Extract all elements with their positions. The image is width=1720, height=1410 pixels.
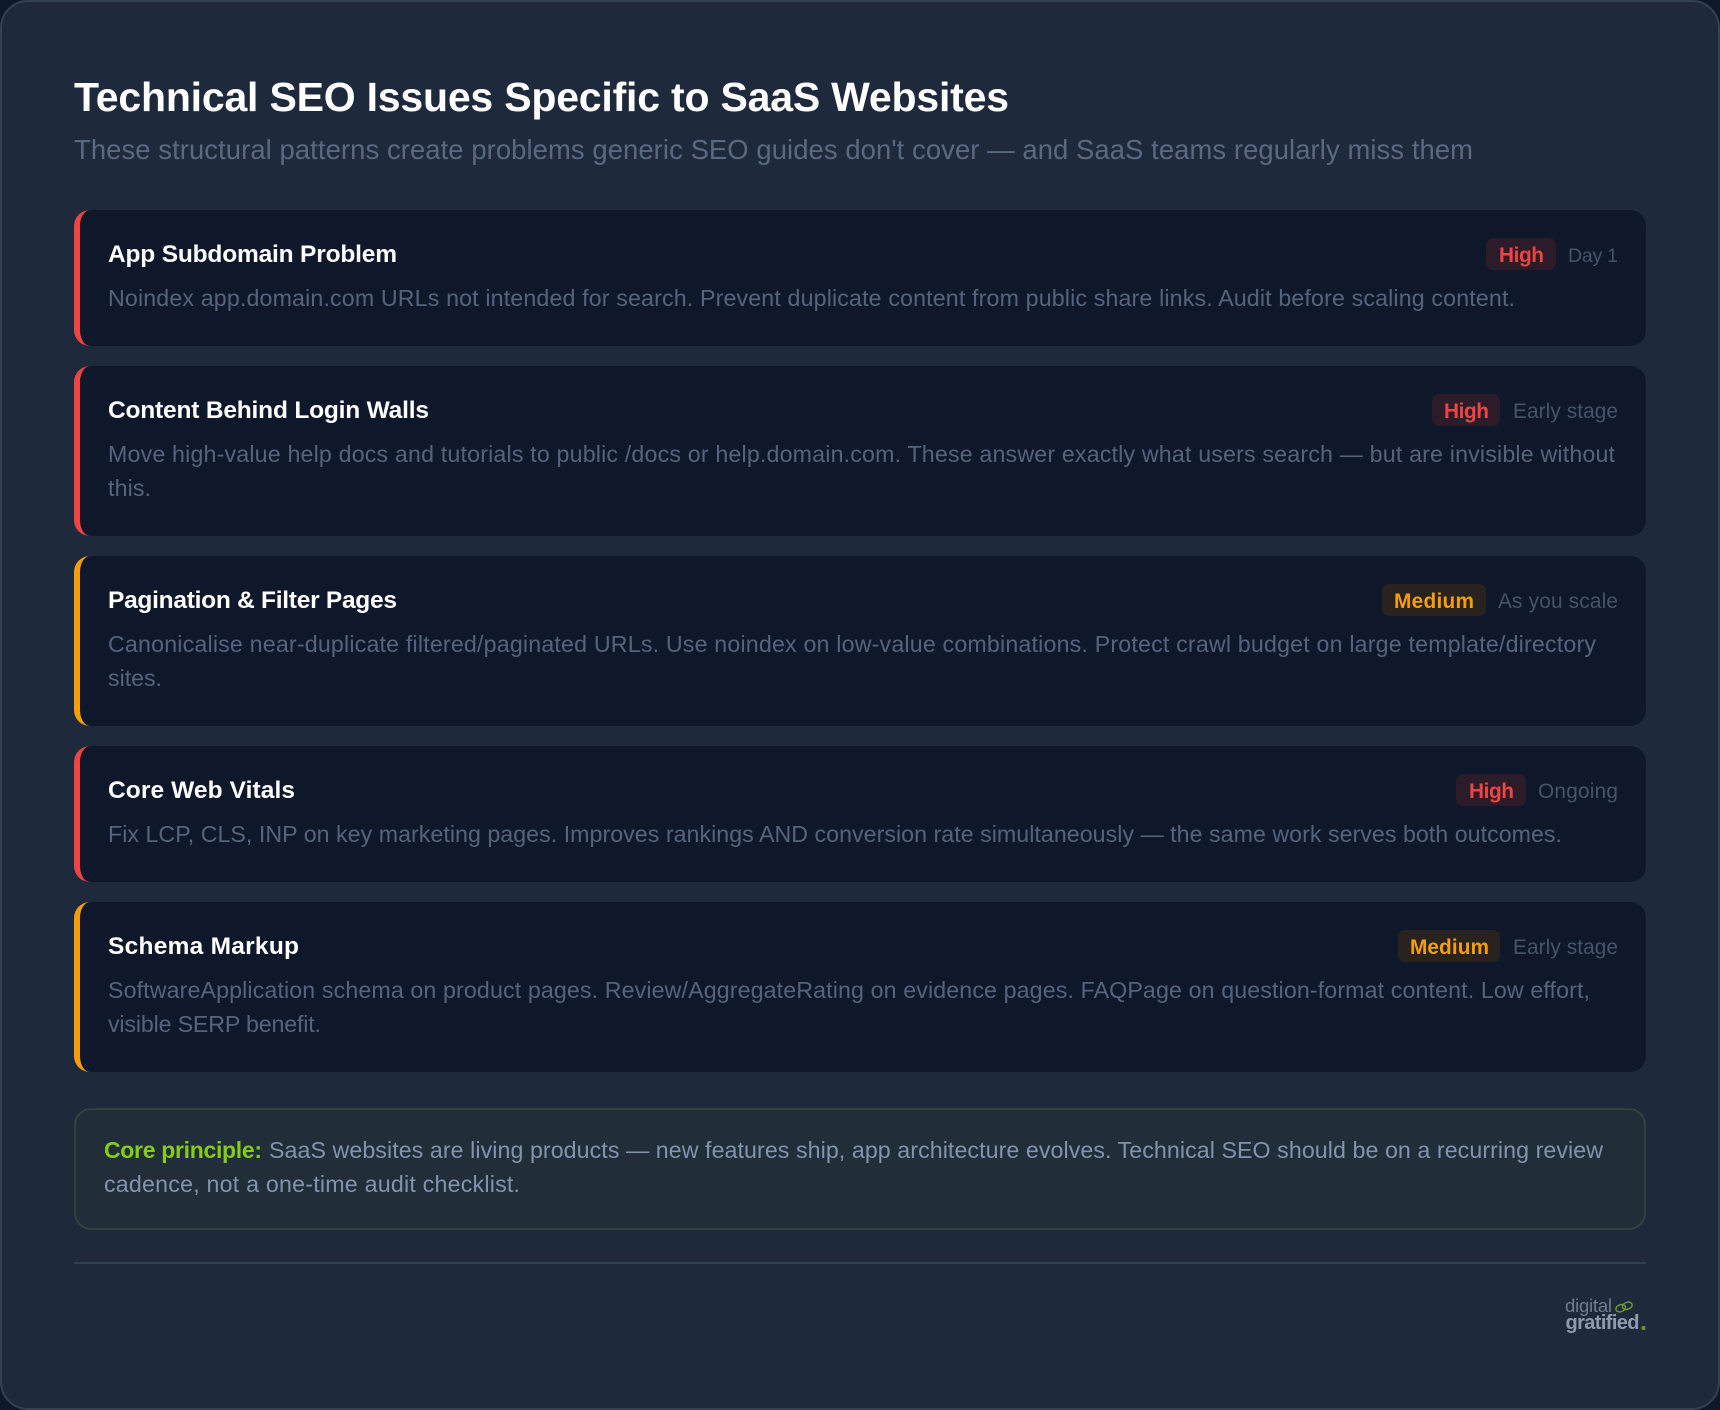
panel: Pagination & Filter Pages [74,556,1646,726]
description: sites. [108,665,162,691]
severity accent bar [74,746,114,882]
card background [80,556,1646,726]
subtitle: These structural patterns create problems generic SEO guides don't cover — and SaaS teams regularly miss them [74,134,1473,165]
description: Fix LCP, CLS, INP on key marketing pages. Improves rankings AND conversion rate simultaneously — the same work serves both outcomes. [108,821,1562,847]
severity badge: High [1499,244,1544,267]
severity badge [1486,238,1556,270]
card heading: Pagination & Filter Pages [108,587,397,614]
timing label: As you scale [1498,590,1618,613]
severity accent bar [74,556,114,726]
card heading: Schema Markup [108,933,299,960]
description [108,441,1616,501]
severity accent bar [74,366,114,536]
callout: core principle: cadence, not a one-time audit checklist. [104,1171,520,1197]
callout: core principle: SaaS websites are living products — new features ship, app architecture evolves. Technical SEO should be on a recurring review [269,1137,1603,1163]
panel: Content Behind Login Walls [74,366,1646,536]
description: Canonicalise near-duplicate filtered/paginated URLs. Use noindex on low-value combinations. Protect crawl budget on large template/directory [108,631,1596,657]
panel: App Subdomain Problem [74,210,1646,346]
description: this. [108,475,151,501]
card background [80,902,1646,1072]
severity badge [1398,930,1500,962]
card heading: App Subdomain Problem [108,241,397,268]
panel: Core Web Vitals [74,746,1646,882]
card background [80,366,1646,536]
severity badge: High [1469,780,1514,803]
panel: Schema Markup [74,902,1646,1072]
logo: digital gratified: digital [1565,1295,1612,1316]
description [108,977,1590,1037]
timing label: Early stage [1513,400,1618,423]
severity badge: High [1444,400,1489,423]
callout: core principle: Core principle: [104,1137,262,1163]
timing label: Early stage [1513,936,1618,959]
description: SoftwareApplication schema on product pages. Review/AggregateRating on evidence pages. FAQPage on question-format content. Low effort, [108,977,1590,1003]
card heading: Content Behind Login Walls [108,397,429,424]
card background [80,746,1646,882]
severity badge: Medium [1410,936,1489,959]
title: Technical SEO Issues Specific to SaaS Websites [74,74,1009,120]
description [108,631,1596,691]
logo: digital gratified: gratified [1566,1312,1640,1334]
icon: chain link [1615,1301,1633,1313]
severity badge [1432,394,1500,426]
callout: core principle [75,1109,1645,1229]
timing label: Day 1 [1568,245,1618,267]
timing label: Ongoing [1538,780,1618,803]
description: visible SERP benefit. [108,1011,321,1037]
severity accent bar [74,902,114,1072]
severity badge: Medium [1394,590,1474,613]
severity accent bar [74,210,114,346]
severity badge [1382,584,1486,616]
card heading: Core Web Vitals [108,777,295,804]
logo: digital gratified [1565,1295,1646,1334]
card background [80,210,1646,346]
severity badge [1456,774,1526,806]
description: Move high-value help docs and tutorials to public /docs or help.domain.com. These answer exactly what users search — but are invisible without [108,441,1616,467]
description: Noindex app.domain.com URLs not intended for search. Prevent duplicate content from public share links. Audit before scaling content. [108,285,1515,311]
